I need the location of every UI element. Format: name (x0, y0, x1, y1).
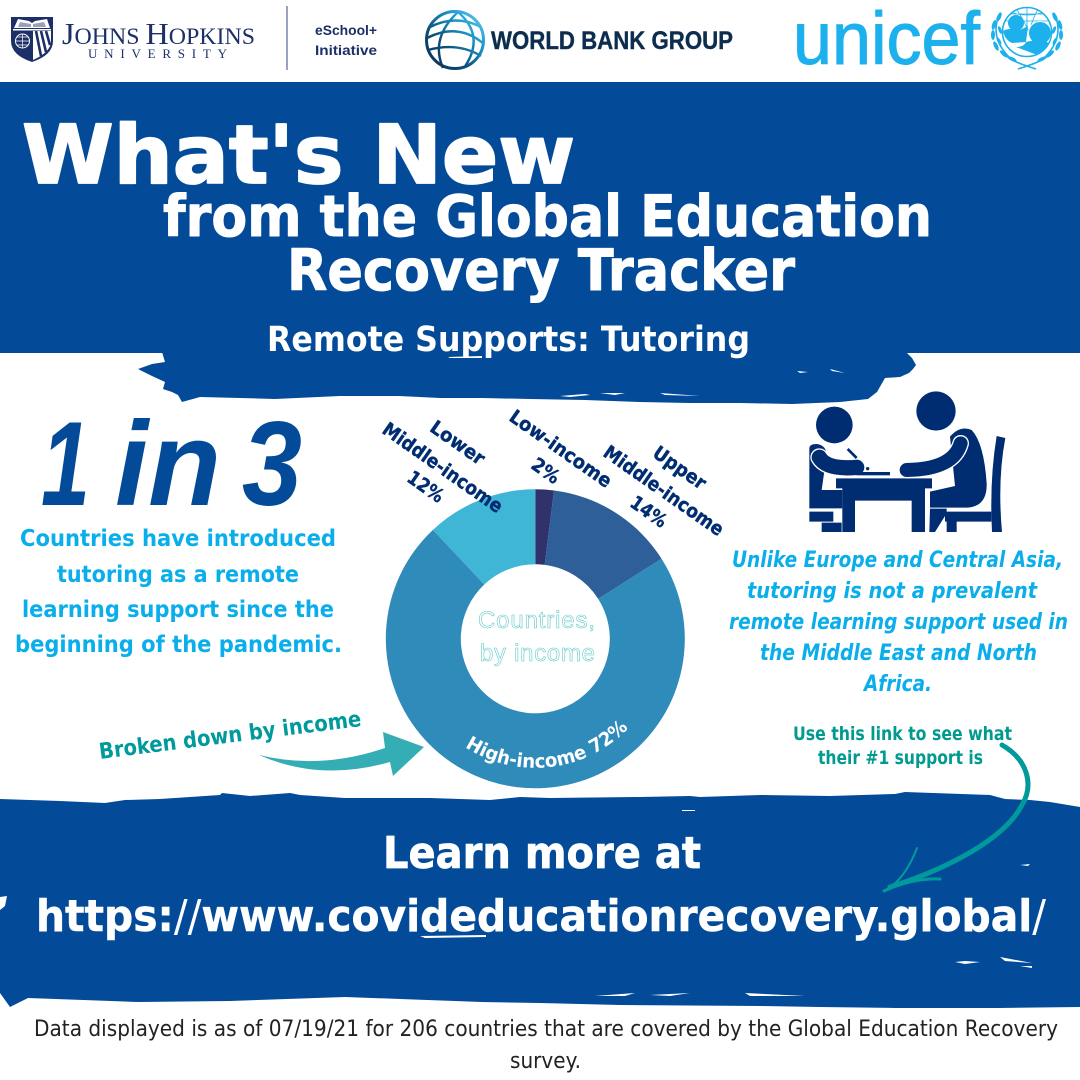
wordmark: Johns Hopkins: JOHNS HOPKINS (62, 16, 255, 51)
label: high-income 72%: High-income 72% (466, 720, 627, 768)
panel: learn more band (0, 792, 1080, 1008)
logo: UNICEF (797, 6, 1063, 70)
segment: upper middle-income 14% (545, 490, 662, 599)
statistic: 1 in 3: 1 (41, 397, 90, 531)
center label: countries, by income (478, 607, 595, 667)
label: upper middle-income: Upper (649, 442, 711, 495)
arrow: hand drawn to URL (884, 745, 1028, 891)
heading: learn more at: Learn more at (383, 828, 701, 879)
label: lower middle-income: Lower (426, 416, 490, 470)
text block: Middle East and North Africa: Africa. (862, 672, 932, 697)
logo: World Bank Group (426, 12, 733, 68)
arrow: to donut chart (259, 732, 424, 776)
link: tracker URL: https://www.covideducationrecovery.global/ (36, 891, 1046, 942)
text block: countries introduced tutoring: learning support since the (22, 597, 334, 623)
logo: eSchool+ Initiative: Initiative (315, 42, 377, 58)
heading: from the Global Education: from the Global Education (163, 184, 932, 250)
logo: eSchool+ Initiative (315, 22, 377, 58)
callout: broken down by income: Broken down by income (98, 707, 363, 765)
text block: countries introduced tutoring (15, 526, 342, 658)
heading: use this link: their #1 support is (818, 747, 983, 769)
text block: countries introduced tutoring: tutoring as a remote (57, 562, 299, 588)
wordmark: University: UNIVERSITY (88, 46, 228, 61)
heading: What's New: What's New (22, 109, 575, 203)
logo: Johns Hopkins University (11, 16, 255, 62)
logo divider (286, 6, 288, 70)
label: lower middle-income: 12% (403, 467, 448, 508)
heading: use this link: Use this link to see what (793, 723, 1012, 745)
subtitle: Remote Supports: Tutoring (267, 320, 750, 360)
footnote: survey. (510, 1049, 581, 1074)
heading: use this link (793, 723, 1012, 769)
student (809, 407, 890, 532)
statistic: 1 in 3: 3 (242, 397, 302, 531)
segment: high-income 72% (386, 530, 685, 788)
text block: countries introduced tutoring: beginning of the pandemic. (15, 632, 342, 658)
text block: countries introduced tutoring: Countries have introduced (20, 526, 336, 552)
label: low-income: 2% (527, 453, 564, 489)
text block: Middle East and North Africa: tutoring is not a prevalent (747, 579, 1038, 604)
wordmark: World Bank Group: WORLD BANK GROUP (491, 27, 733, 55)
icon: World Bank globe (426, 12, 484, 68)
title (22, 109, 932, 304)
center label: countries, by income: Countries, (478, 607, 595, 634)
center label: countries, by income: by income (480, 640, 595, 667)
label: low-income: Low-income (505, 406, 616, 493)
logo: eSchool+ Initiative: eSchool+ (315, 22, 377, 38)
label: upper middle-income: 14% (626, 492, 671, 533)
panel: title banner (0, 82, 1080, 404)
tutor (907, 391, 987, 532)
label: upper middle-income: Middle-income (599, 441, 728, 541)
donut chart: countries by income (378, 406, 728, 788)
segment: lower middle-income 12% (433, 489, 535, 584)
chair (945, 436, 1005, 532)
segment: low-income 2% (535, 489, 554, 565)
label: lower middle-income: Middle-income (378, 418, 507, 518)
icon: Johns Hopkins shield (11, 17, 53, 62)
footnote (34, 1017, 1058, 1074)
icon: UNICEF emblem (991, 6, 1063, 69)
heading: Recovery Tracker: Recovery Tracker (287, 238, 795, 304)
text block: Middle East and North Africa (729, 548, 1068, 697)
text block: Middle East and North Africa: the Middle East and North (760, 641, 1037, 666)
icon: tutoring session (809, 391, 1005, 532)
table (836, 478, 932, 532)
statistic: 1 in 3: in (115, 397, 221, 531)
statistic: 1 in 3 (41, 397, 302, 531)
